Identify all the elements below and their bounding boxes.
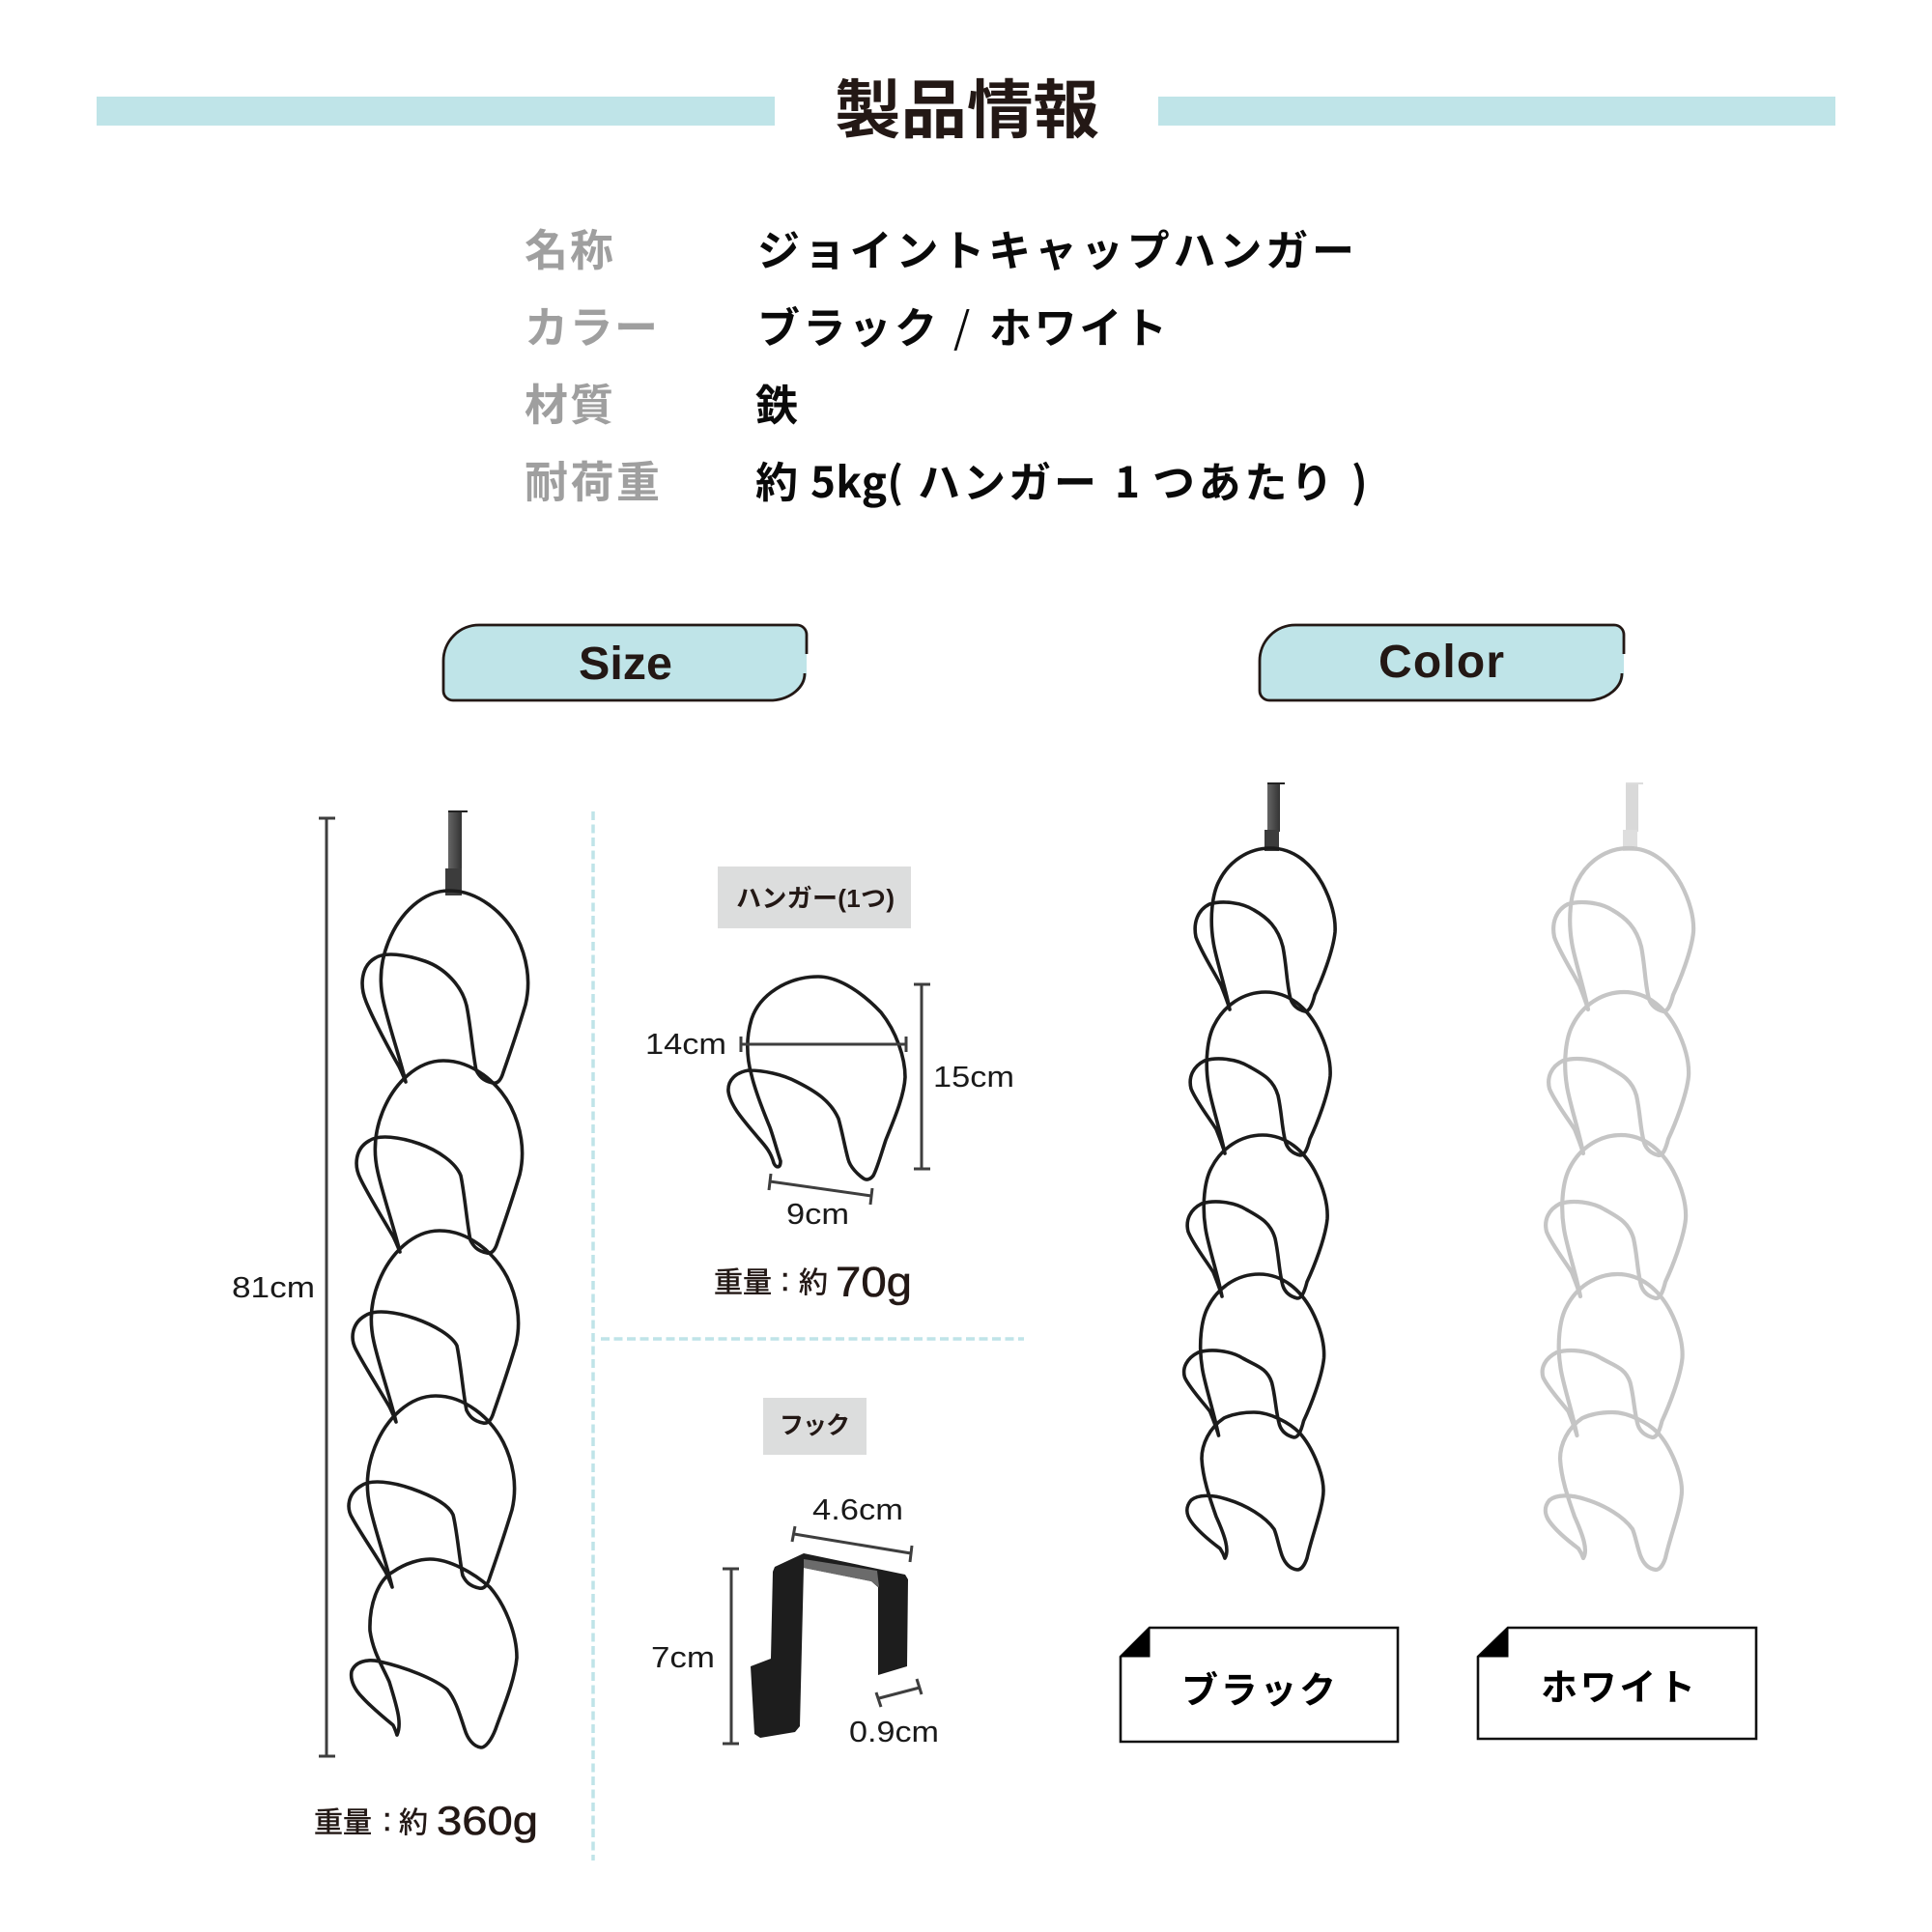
dimension: 9cm bbox=[769, 1174, 872, 1231]
weight: 360g: 約 bbox=[399, 1807, 428, 1839]
weight: 70g bbox=[714, 1259, 912, 1306]
spec table bbox=[525, 216, 1368, 510]
hanger 1 bbox=[1553, 848, 1693, 1011]
dimension: 14cm: 14cm bbox=[645, 1027, 726, 1061]
row: 耐荷重: 約 bbox=[755, 448, 798, 510]
row: 耐荷重: 1 bbox=[1115, 448, 1140, 510]
hanger 3 bbox=[1546, 1135, 1686, 1298]
row: カラー: ブラック bbox=[757, 294, 937, 355]
hanger 4 bbox=[1543, 1274, 1683, 1437]
weight: 360g: 360g bbox=[437, 1798, 538, 1843]
door hook bbox=[1623, 782, 1643, 851]
label: ブラック bbox=[1121, 1628, 1398, 1742]
tag: フック bbox=[763, 1398, 867, 1455]
hanger 5 bbox=[1187, 1412, 1323, 1570]
divider dashes bbox=[593, 811, 1024, 1861]
dimension: 15cm bbox=[914, 984, 1014, 1169]
tag: ハンガー(1つ): ハンガー(1つ) bbox=[736, 884, 895, 913]
dimension: 4.6cm bbox=[792, 1492, 912, 1562]
weight: 70g: 70g bbox=[836, 1259, 912, 1306]
row: 耐荷重 bbox=[525, 448, 1368, 510]
row: 耐荷重: ) bbox=[1351, 448, 1368, 510]
weight: 360g: : bbox=[383, 1802, 391, 1838]
hanger 1 bbox=[362, 891, 528, 1083]
hanger 1 bbox=[1195, 848, 1335, 1011]
door hook bbox=[445, 810, 468, 895]
row: 材質: 鉄 bbox=[755, 371, 798, 433]
dimension: 14cm bbox=[645, 1027, 906, 1061]
badge: Color bbox=[1260, 625, 1624, 700]
title band: 製品情報 bbox=[97, 74, 1835, 146]
dimension: 7cm: 7cm bbox=[651, 1640, 715, 1674]
label: ホワイト bbox=[1478, 1628, 1756, 1739]
title: 製品情報 bbox=[835, 74, 1099, 146]
hanger 2 bbox=[1548, 992, 1689, 1155]
badge: Color: Color bbox=[1378, 637, 1504, 688]
weight: 360g: 重量 bbox=[314, 1807, 372, 1839]
dimension: 15cm: 15cm bbox=[933, 1060, 1014, 1094]
row: 名称: ジョイントキャップハンガー bbox=[757, 216, 1354, 278]
product: black chain bbox=[1184, 782, 1335, 1570]
row: カラー: カラー bbox=[525, 303, 658, 353]
hanger 3 bbox=[1187, 1135, 1327, 1298]
row: カラー: / bbox=[953, 294, 970, 355]
hanger 3 bbox=[353, 1231, 519, 1423]
hanger 4 bbox=[349, 1396, 515, 1588]
weight: 360g bbox=[314, 1798, 538, 1843]
row: カラー bbox=[525, 294, 1167, 355]
hanger 5 bbox=[352, 1559, 517, 1747]
badge: Size: Size bbox=[579, 639, 672, 690]
dimension: 0.9cm bbox=[849, 1679, 939, 1748]
panel: single hanger bbox=[645, 867, 1014, 1306]
row: 材質: 材質 bbox=[525, 381, 613, 430]
full chain with 81cm dimension bbox=[232, 810, 538, 1843]
dimension: 4.6cm: 4.6cm bbox=[812, 1492, 903, 1526]
label: 81cm: 81cm bbox=[232, 1270, 315, 1304]
hanger 4 bbox=[1184, 1274, 1324, 1437]
hanger 2 bbox=[356, 1061, 523, 1253]
panel: hook bbox=[651, 1398, 939, 1748]
dimension: 0.9cm: 0.9cm bbox=[849, 1715, 939, 1748]
weight: 70g: 約 bbox=[799, 1267, 828, 1299]
label: ホワイト: ホワイト bbox=[1541, 1668, 1695, 1709]
weight: 70g: 重量 bbox=[714, 1267, 772, 1299]
row: 耐荷重: 5kg( bbox=[810, 448, 903, 510]
badge: Size bbox=[443, 625, 807, 700]
tag: ハンガー(1つ) bbox=[718, 867, 911, 928]
door hook bbox=[1264, 782, 1285, 851]
row: 耐荷重: ハンガー bbox=[918, 448, 1096, 510]
hanger 5 bbox=[1546, 1412, 1682, 1570]
hook shape bbox=[751, 1553, 908, 1738]
dimension line: 81cm bbox=[319, 818, 335, 1756]
dimension: 9cm: 9cm bbox=[786, 1197, 849, 1231]
row: 名称: 名称 bbox=[525, 226, 613, 275]
row: 耐荷重: 耐荷重 bbox=[525, 458, 660, 507]
row: カラー: ホワイト bbox=[989, 294, 1167, 355]
product: white chain bbox=[1543, 782, 1693, 1570]
hanger 2 bbox=[1190, 992, 1330, 1155]
weight: 70g: : bbox=[781, 1262, 789, 1298]
dimension: 7cm bbox=[651, 1569, 739, 1744]
row: 耐荷重: つあたり bbox=[1152, 448, 1333, 510]
tag: フック: フック bbox=[780, 1412, 850, 1439]
label: ブラック: ブラック bbox=[1181, 1670, 1336, 1712]
hanger outline bbox=[728, 977, 905, 1179]
row: 材質 bbox=[525, 371, 798, 433]
